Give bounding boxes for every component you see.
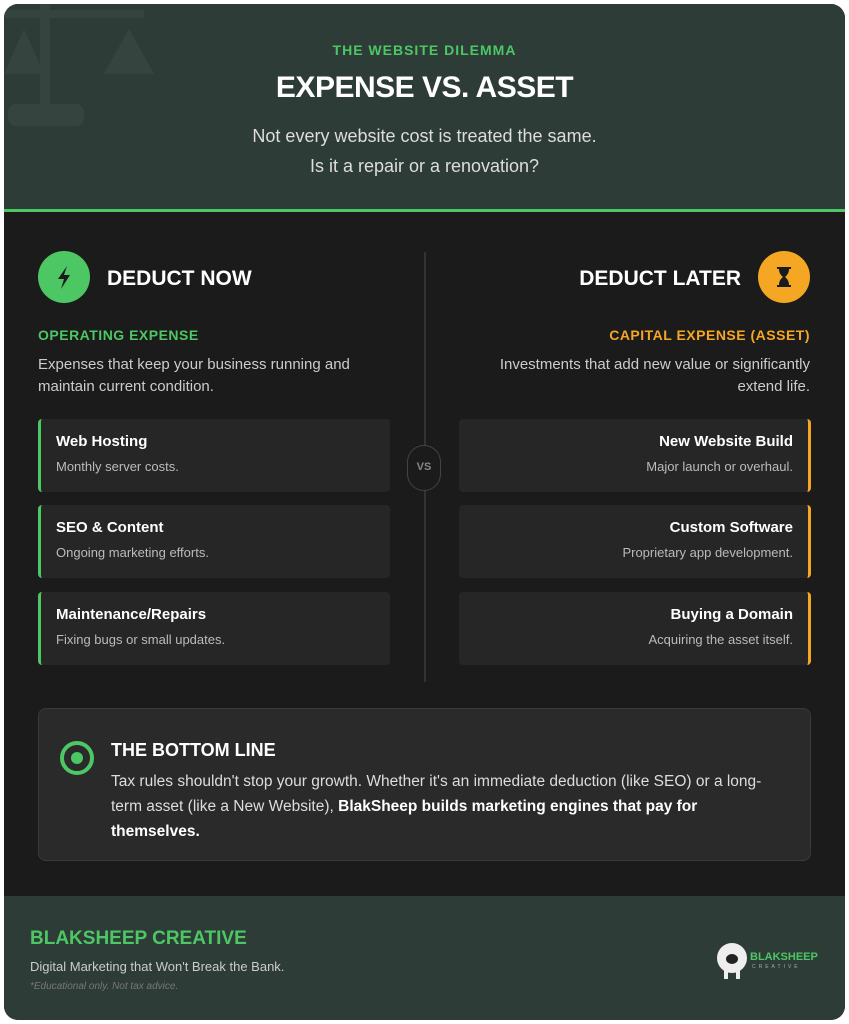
item: domain: Buying a Domain bbox=[670, 606, 793, 623]
icon: hourglass bbox=[758, 251, 810, 303]
item: maintenance: Fixing bugs or small updates. bbox=[56, 632, 225, 647]
icon: target bbox=[60, 741, 94, 775]
item: custom software: Custom Software bbox=[670, 519, 793, 536]
item: domain: Acquiring the asset itself. bbox=[648, 632, 793, 647]
item: new website: New Website Build bbox=[659, 433, 793, 450]
description: Expenses that keep your business running and maintain current condition. bbox=[38, 356, 350, 395]
icon: lightning bbox=[38, 251, 90, 303]
item: custom software: Proprietary app development. bbox=[622, 545, 793, 560]
item: web hosting: Web Hosting bbox=[56, 433, 147, 450]
panel: deduct later bbox=[500, 251, 810, 395]
label: OPERATING EXPENSE bbox=[38, 327, 199, 343]
item: seo: Ongoing marketing efforts. bbox=[56, 545, 209, 560]
brand name: BLAKSHEEP CREATIVE bbox=[30, 928, 247, 949]
item: web hosting: Monthly server costs. bbox=[56, 459, 179, 474]
text: Tax rules shouldn't stop your growth. Whether it's an immediate deduction (like SEO) or a long-term asset (like a New Website), BlakSheep builds marketing engines that pay for themselves. bbox=[111, 773, 761, 840]
item: maintenance: Maintenance/Repairs bbox=[56, 606, 206, 623]
heading: THE BOTTOM LINE bbox=[111, 740, 276, 760]
vs badge bbox=[407, 445, 441, 491]
subtitle bbox=[252, 126, 597, 176]
heading: DEDUCT LATER bbox=[579, 267, 741, 290]
item: domain bbox=[459, 592, 811, 665]
icon: scales watermark bbox=[4, 10, 6, 16]
item: maintenance bbox=[38, 592, 390, 665]
divider vertical bbox=[424, 252, 426, 682]
item: seo bbox=[38, 505, 390, 578]
header bbox=[4, 4, 845, 212]
logo: BLAKSHEEP bbox=[750, 951, 818, 963]
heading: DEDUCT NOW bbox=[107, 267, 252, 290]
description: Investments that add new value or significantly extend life. bbox=[500, 356, 810, 395]
subtitle: Is it a repair or a renovation? bbox=[310, 156, 539, 176]
item: seo: SEO & Content bbox=[56, 519, 164, 536]
item: new website: Major launch or overhaul. bbox=[646, 459, 793, 474]
item: custom software bbox=[459, 505, 811, 578]
item: new website bbox=[459, 419, 811, 492]
callout: bottom line bbox=[38, 708, 811, 861]
logo: CREATIVE bbox=[752, 964, 801, 970]
subtitle: Not every website cost is treated the same. bbox=[252, 126, 597, 146]
vs badge: VS bbox=[417, 461, 431, 473]
tagline: Digital Marketing that Won't Break the Bank. bbox=[30, 959, 284, 974]
footer bbox=[4, 896, 845, 1020]
panel: deduct now bbox=[38, 251, 350, 395]
title: EXPENSE VS. ASSET bbox=[276, 71, 573, 104]
disclaimer: *Educational only. Not tax advice. bbox=[30, 981, 178, 992]
label: CAPITAL EXPENSE (ASSET) bbox=[609, 327, 810, 343]
eyebrow: THE WEBSITE DILEMMA bbox=[333, 42, 516, 58]
logo bbox=[717, 943, 818, 979]
item: web hosting bbox=[38, 419, 390, 492]
